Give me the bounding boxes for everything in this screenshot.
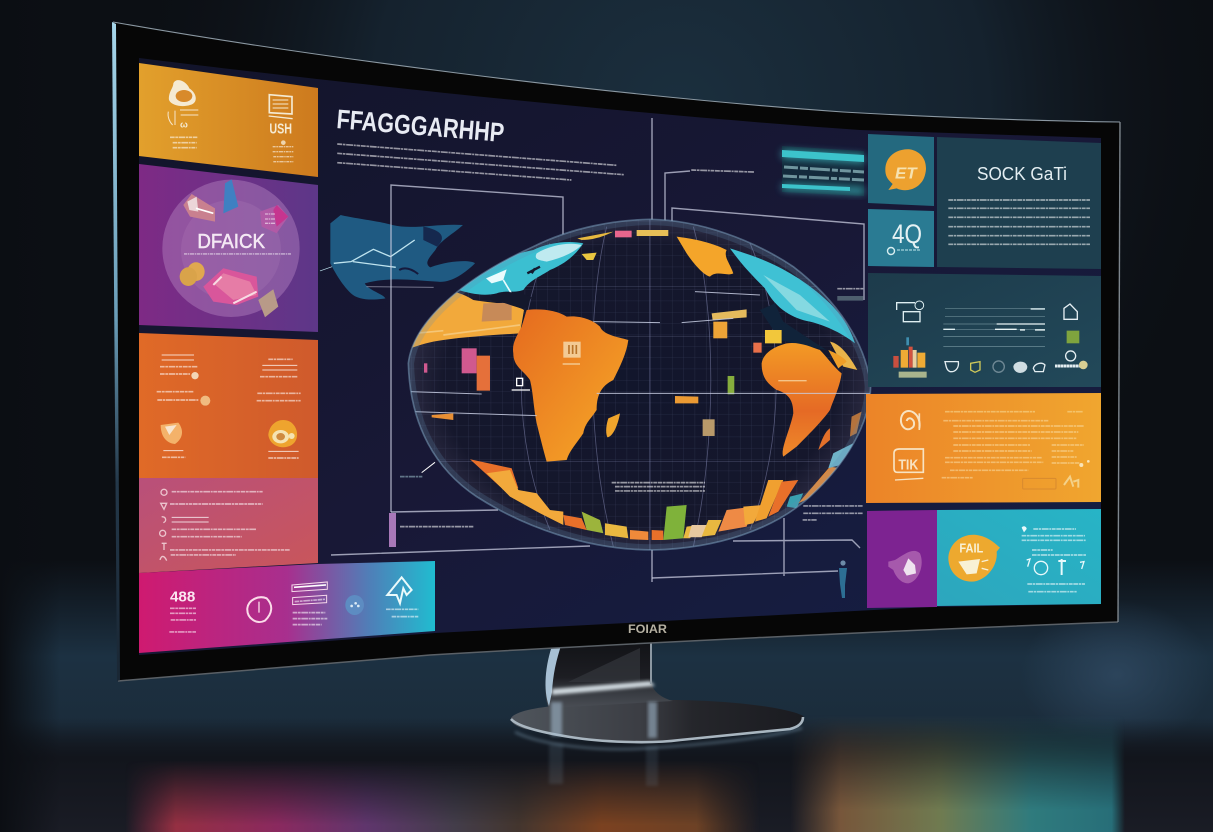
panel: teal badge 4Q: 4Q [892, 219, 922, 249]
continent: africa shape [762, 343, 842, 457]
continent: cyan east [730, 248, 855, 343]
side labels around globe [400, 289, 863, 527]
icon: gold coins [187, 262, 205, 281]
globe [400, 210, 880, 560]
icon: orange head [161, 423, 182, 444]
data tiles [424, 309, 762, 436]
icon: magenta tag [260, 205, 288, 233]
icon: speech bubble [948, 535, 1000, 582]
label DFAICK: DFAICK [197, 231, 266, 253]
panel: SOCK text: SOCK GaTi [977, 164, 1067, 184]
continent: left orange band [410, 288, 524, 348]
icon: blue dot [345, 595, 364, 615]
panel: gradient band [139, 561, 435, 653]
globe bright lines [408, 292, 870, 416]
panel: orange top left: ω [180, 119, 188, 129]
person figure [839, 560, 847, 598]
continent: top yellow [577, 232, 613, 240]
monitor bezel [112, 22, 1120, 681]
icon: white arrow [387, 577, 412, 603]
mini bar chart [893, 337, 927, 378]
panel: orange middle left [139, 333, 318, 478]
panel: cyan FAIL card: FAIL [959, 541, 984, 555]
monitor stand [511, 640, 803, 786]
globe grid [400, 210, 880, 560]
panel: purple circle [139, 164, 318, 332]
panel: orange text card: TIK [898, 457, 919, 473]
panel: teal badge ET [868, 134, 934, 206]
panel: teal badge 4Q [868, 209, 934, 267]
panel: dark teal dashboard [868, 273, 1101, 387]
panel: teal badge ET: ET [895, 165, 918, 182]
bars and text [292, 582, 327, 592]
panel: pink list [139, 478, 318, 573]
icon: TIK card [894, 449, 923, 472]
monitor screen [139, 58, 1101, 655]
brand label: FOIAR [628, 622, 667, 636]
callout: glowing cyan [691, 146, 864, 196]
panel: cyan FAIL card [937, 509, 1101, 606]
row of round icons [945, 304, 1079, 372]
connector lines [331, 118, 864, 582]
panel: orange top left: USH [269, 121, 292, 137]
continent: cyan north [458, 242, 583, 295]
icon: tan card [258, 289, 278, 317]
icon: pink parcel [183, 194, 215, 222]
text lines [945, 409, 1035, 414]
panel: SOCK text [937, 137, 1101, 269]
glass band inside rim [408, 219, 871, 550]
timeline lines [943, 308, 1045, 347]
icon: blue card [223, 179, 238, 213]
continent: south america shape [513, 309, 628, 462]
icon: dashboard device [897, 303, 920, 322]
panel: orange top left [139, 63, 318, 177]
panel: orange text card [866, 393, 1101, 503]
icon: gold donut [268, 420, 297, 447]
intro text block [337, 144, 624, 180]
icon: pink box [203, 268, 258, 305]
icon: shield ring [247, 597, 271, 622]
icon: monitor [269, 95, 292, 114]
icon: cloud blob [169, 80, 196, 106]
panel: gradient band: 488 [170, 590, 195, 606]
map: dark blue continent [320, 215, 475, 300]
title: FFAGGGARHHP [335, 104, 505, 148]
floor with colour reflections [12, 578, 1213, 832]
panel: purple badge [867, 510, 937, 608]
icon: spiral [901, 411, 920, 429]
list markers [160, 489, 167, 561]
globe glass rim [408, 219, 871, 550]
bottom bar charts [470, 412, 862, 540]
island [606, 413, 620, 437]
